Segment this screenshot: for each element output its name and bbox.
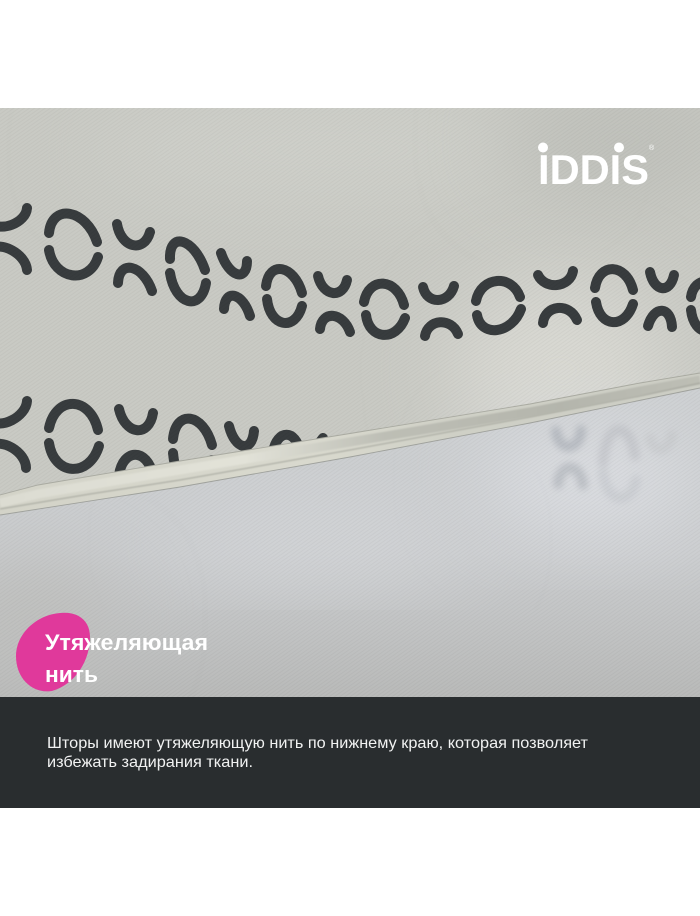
show-through pattern (550, 424, 639, 501)
printed pattern: lower row (0, 401, 323, 484)
upper beige fabric (0, 108, 700, 494)
heading: Утяжеляющая (45, 630, 208, 655)
pink blob (16, 613, 90, 691)
logo: IDDIS: ® (649, 144, 655, 152)
heading (45, 630, 208, 687)
infographic canvas (0, 108, 700, 808)
caption text: Шторы имеют утяжеляющую нить по нижнему краю, которая позволяет (47, 735, 589, 752)
lower white lining (0, 380, 700, 697)
photo: curtain fabric (0, 80, 700, 697)
heading: нить (45, 662, 98, 687)
weighted hem thread (0, 373, 700, 515)
printed pattern: upper row (0, 208, 700, 336)
dark caption panel (0, 697, 700, 808)
caption text: избежать задирания ткани. (47, 754, 253, 771)
caption text (47, 735, 589, 771)
fabric texture (0, 108, 700, 697)
logo: IDDIS: IDDIS (538, 146, 649, 193)
